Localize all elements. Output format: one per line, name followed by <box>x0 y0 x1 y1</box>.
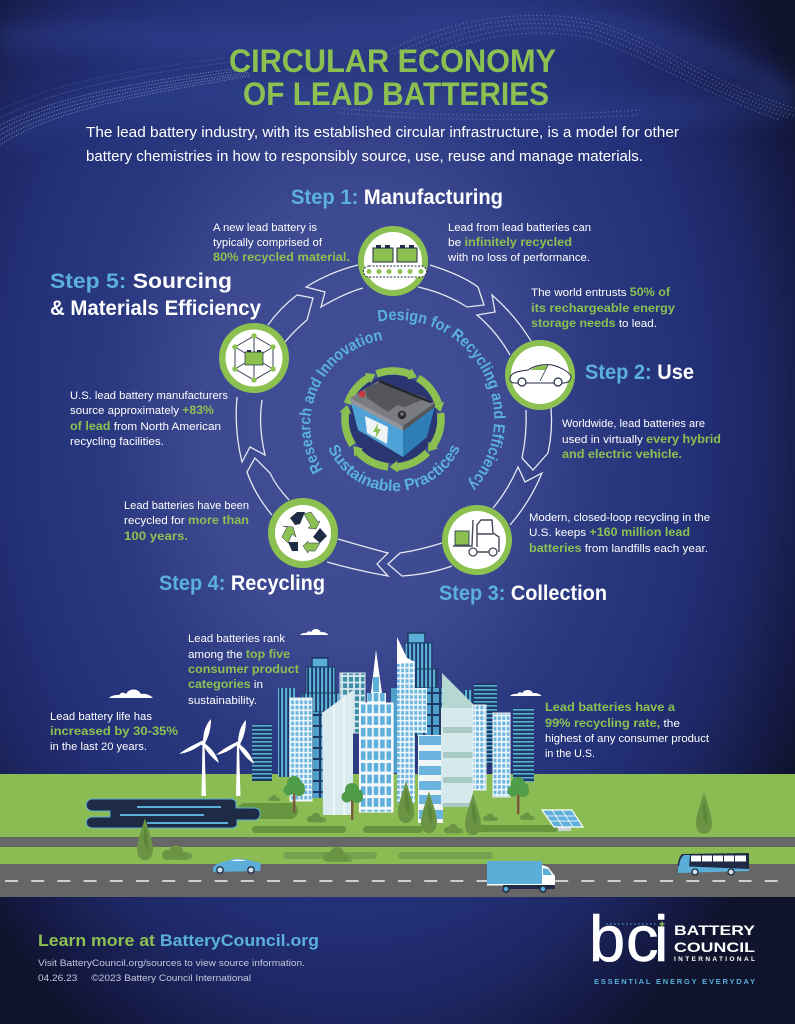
text: recycled material: 80% recycled material. <box>213 250 350 264</box>
text: battery life: increased by 30-35% <box>50 724 178 738</box>
title: OF LEAD BATTERIES <box>243 76 549 112</box>
text: energy storage: storage needs to lead. <box>531 316 657 330</box>
logo: battery council international: bci <box>589 902 668 975</box>
text: hybrid and electric: and electric vehicle. <box>562 447 682 461</box>
heading: step 2: Step 2: Use <box>585 361 694 384</box>
text: top five: consumer product <box>188 662 299 676</box>
text: recycled material: A new lead battery is <box>213 222 317 234</box>
icon: sourcing network <box>219 323 289 393</box>
text: top five: categories in <box>188 677 263 691</box>
icon: car <box>505 340 575 410</box>
heading: step 1: Step 1: Manufacturing <box>291 186 503 209</box>
text: top five <box>188 633 299 707</box>
curved text: design for recycling and efficiency: Design for Recycling and Efficiency <box>378 308 506 490</box>
text: hybrid and electric <box>562 418 721 461</box>
text: closed-loop recycling: batteries from landfills each year. <box>529 541 708 555</box>
text: top five: sustainability. <box>188 695 257 707</box>
icon: recycling <box>268 498 338 568</box>
text: north american lead: U.S. lead battery manufacturers <box>70 390 228 402</box>
logo: battery council international: ESSENTIAL ENERGY EVERYDAY <box>594 977 755 986</box>
text: battery life: in the last 20 years. <box>50 741 147 753</box>
battery-shaped pond <box>86 799 298 828</box>
intro text: The lead battery industry, with its established circular infrastructure, is a model for other <box>86 124 679 141</box>
footer notes <box>38 958 305 984</box>
text: closed-loop recycling: Modern, closed-loop recycling in the <box>529 512 710 524</box>
solar panel <box>542 810 583 831</box>
text: recycled material <box>213 222 350 264</box>
text: north american lead <box>70 390 228 448</box>
trees and bushes <box>137 776 712 862</box>
landscape hedges <box>252 825 558 833</box>
wind turbines <box>179 719 254 796</box>
text: closed-loop recycling <box>529 512 710 555</box>
title <box>229 43 556 112</box>
text: energy storage: The world entrusts 50% of <box>531 285 671 299</box>
heading: step 3: Step 3: Collection <box>439 582 607 605</box>
circular arrows ribbon <box>236 265 552 576</box>
text: infinitely recycled <box>447 222 591 264</box>
icon: manufacturing <box>358 226 428 296</box>
text: closed-loop recycling: U.S. keeps +160 million lead <box>529 525 690 539</box>
text: hybrid and electric: Worldwide, lead batteries are <box>562 418 705 430</box>
heading: step 5: & Materials Efficiency <box>50 297 261 320</box>
curved text: research and innovation: Research and Innovation <box>299 332 382 474</box>
intro text: battery chemistries in how to responsibly source, use, reuse and manage materials. <box>86 148 643 165</box>
text: recycling rate <box>545 700 710 760</box>
text: recycling rate: highest of any consumer product <box>545 733 710 745</box>
bus <box>678 853 749 875</box>
text: energy storage <box>531 285 675 330</box>
text: top five: Lead batteries rank <box>188 633 285 645</box>
text: recycling rate: in the U.S. <box>545 748 595 760</box>
heading: step 4: Step 4: Recycling <box>159 572 325 595</box>
text: recycling rate: Lead batteries have a <box>545 700 675 714</box>
footer call to action: Learn more at BatteryCouncil.org <box>38 931 319 950</box>
text: energy storage: its rechargeable energy <box>531 301 675 315</box>
roads <box>0 837 795 897</box>
text: north american lead: source approximately +83% <box>70 403 214 417</box>
text: battery life <box>50 711 178 753</box>
text: 100 years: Lead batteries have been <box>124 500 249 512</box>
text: infinitely recycled: Lead from lead batteries can <box>448 222 591 234</box>
icon: forklift <box>442 505 512 575</box>
truck <box>487 861 555 892</box>
text: infinitely recycled: with no loss of performance. <box>447 252 590 264</box>
text: recycled material: typically comprised of <box>213 237 323 249</box>
clouds <box>109 629 542 698</box>
logo: battery council international: COUNCIL <box>674 939 756 955</box>
cityscape <box>252 633 534 823</box>
text: top five: among the top five <box>188 647 290 661</box>
heading: step 5 <box>50 270 261 320</box>
intro text <box>86 124 679 165</box>
heading: step 5: Step 5: Sourcing <box>50 270 232 293</box>
curved text: sustainable practices: Sustainable Practices <box>329 444 459 492</box>
logo: battery council international: INTERNATIONAL <box>674 956 755 963</box>
logo: battery council international <box>589 902 756 986</box>
footer notes: Visit BatteryCouncil.org/sources to view source information. <box>38 958 305 969</box>
text: 100 years: recycled for more than <box>124 513 249 527</box>
background wave pattern <box>0 15 795 145</box>
logo: battery council international: BATTERY <box>674 922 756 938</box>
title: CIRCULAR ECONOMY <box>229 43 556 79</box>
car <box>213 859 261 873</box>
text: infinitely recycled: be infinitely recycled <box>448 235 572 249</box>
text: 100 years: 100 years. <box>124 529 188 543</box>
text: north american lead: recycling facilities. <box>70 436 164 448</box>
text: north american lead: of lead from North American <box>70 419 221 433</box>
text: hybrid and electric: used in virtually every hybrid <box>562 432 721 446</box>
text: recycling rate: 99% recycling rate, the <box>545 716 680 730</box>
text: battery life: Lead battery life has <box>50 711 152 723</box>
footer notes: 04.26.23 ©2023 Battery Council International <box>38 973 251 984</box>
ground and grass <box>0 774 795 838</box>
text: 100 years <box>124 500 249 543</box>
center battery illustration <box>333 361 449 479</box>
